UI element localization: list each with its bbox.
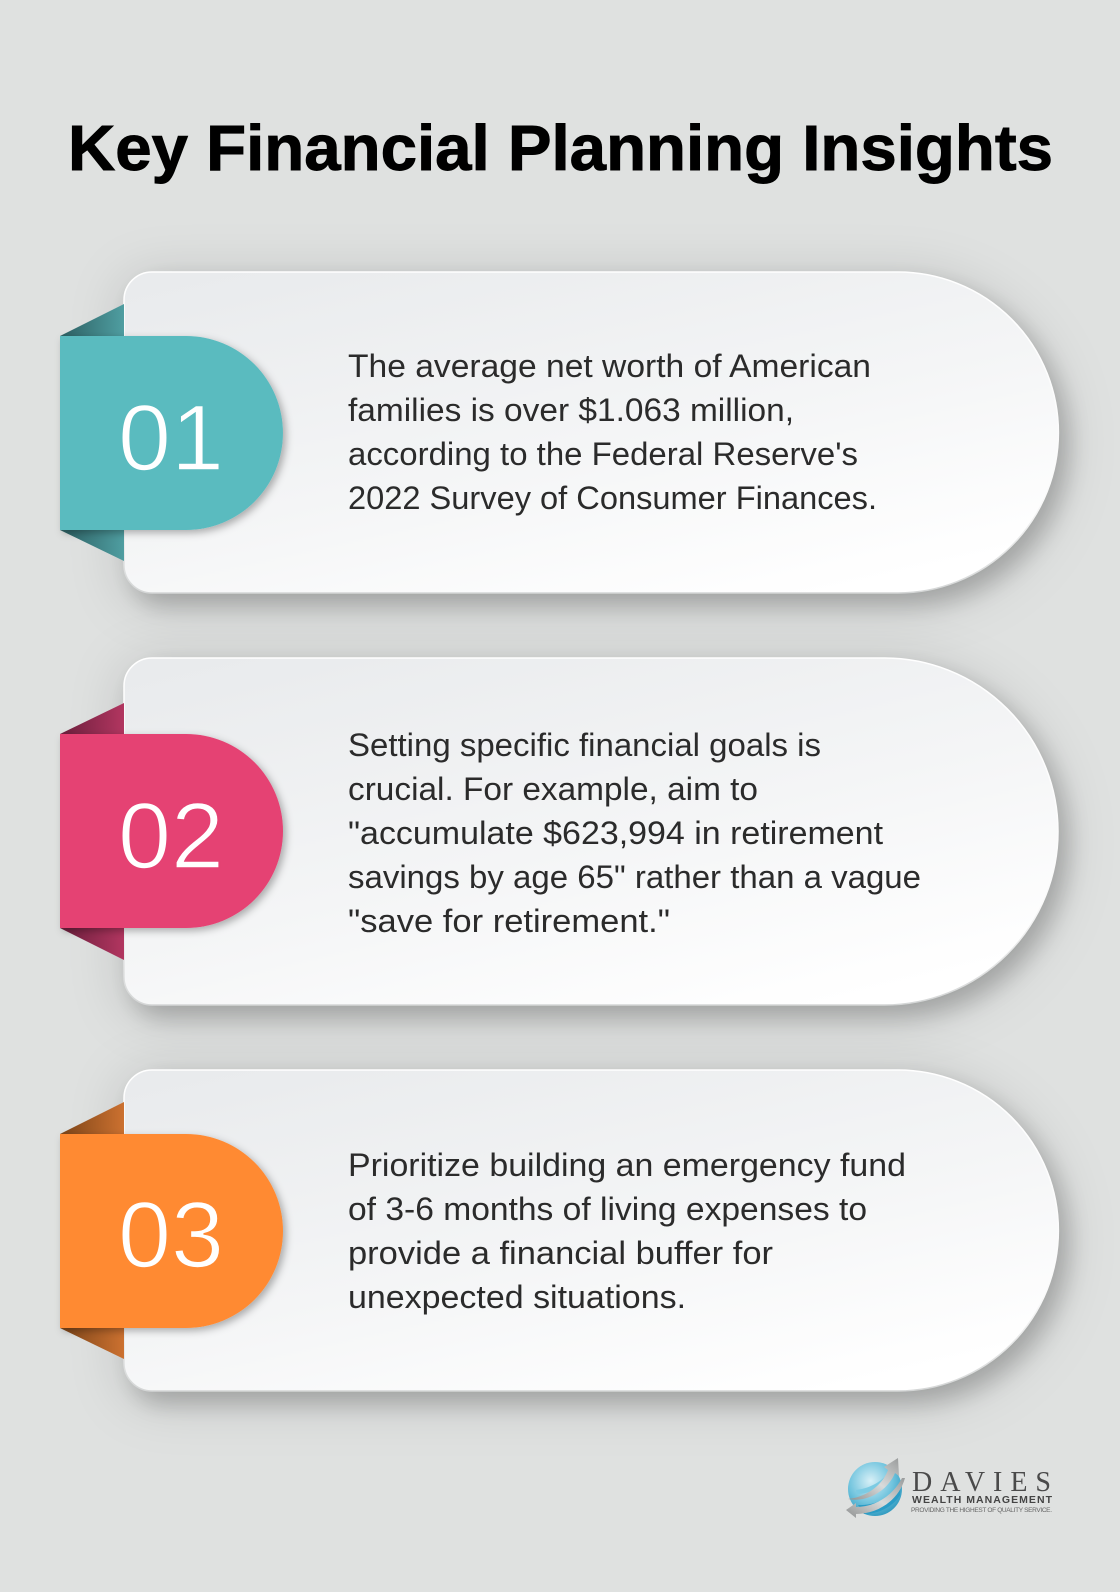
text 02: Setting specific financial goals is [348,727,821,763]
text 01: according to the Federal Reserve's [348,436,858,472]
logo: Davies Wealth Management [846,1458,1053,1518]
ribbon fold bottom 03 [60,1328,124,1359]
ribbon fold top 01 [60,304,124,336]
icon: globe with arrows [846,1458,905,1518]
text 03: unexpected situations. [348,1279,686,1315]
text 03: of 3-6 months of living expenses to [348,1191,867,1227]
number badge 02: 02 [118,783,224,888]
ribbon fold bottom 02 [60,928,124,960]
text 03: provide a financial buffer for [348,1235,773,1271]
text 02: "accumulate $623,994 in retirement [348,815,883,851]
ribbon fold top 03 [60,1102,124,1134]
card background 02 [124,658,1058,1005]
ribbon fold top 02 [60,703,124,734]
number badge 03: 03 [118,1182,224,1287]
number badge 03 [60,1134,283,1328]
number badge 02 [60,734,283,928]
card background 01 [124,272,1058,593]
text 02 [348,727,921,939]
text 03 [348,1147,906,1315]
text 01 [348,348,877,516]
ribbon fold bottom 01 [60,530,124,561]
logo wordmark: WEALTH MANAGEMENT [912,1494,1053,1506]
panel: insight 02 [60,658,1058,1005]
number badge 01: 01 [118,385,224,490]
text 02: savings by age 65" rather than a vague [348,859,921,895]
text 02: crucial. For example, aim to [348,771,758,807]
panel: insight 03 [60,1070,1058,1391]
text 01: 2022 Survey of Consumer Finances. [348,480,877,516]
text 01: The average net worth of American [348,348,871,384]
card background 03 [124,1070,1058,1391]
text 01: families is over $1.063 million, [348,392,794,428]
text 03: Prioritize building an emergency fund [348,1147,906,1183]
logo wordmark: DAVIES [912,1467,1051,1498]
text 02: "save for retirement." [348,903,670,939]
logo wordmark: PROVIDING THE HIGHEST OF QUALITY SERVICE. [911,1507,1052,1514]
number badge 01 [60,336,283,530]
logo wordmark [911,1467,1053,1514]
panel: insight 01 [60,272,1058,593]
title: Key Financial Planning Insights [68,112,1053,184]
